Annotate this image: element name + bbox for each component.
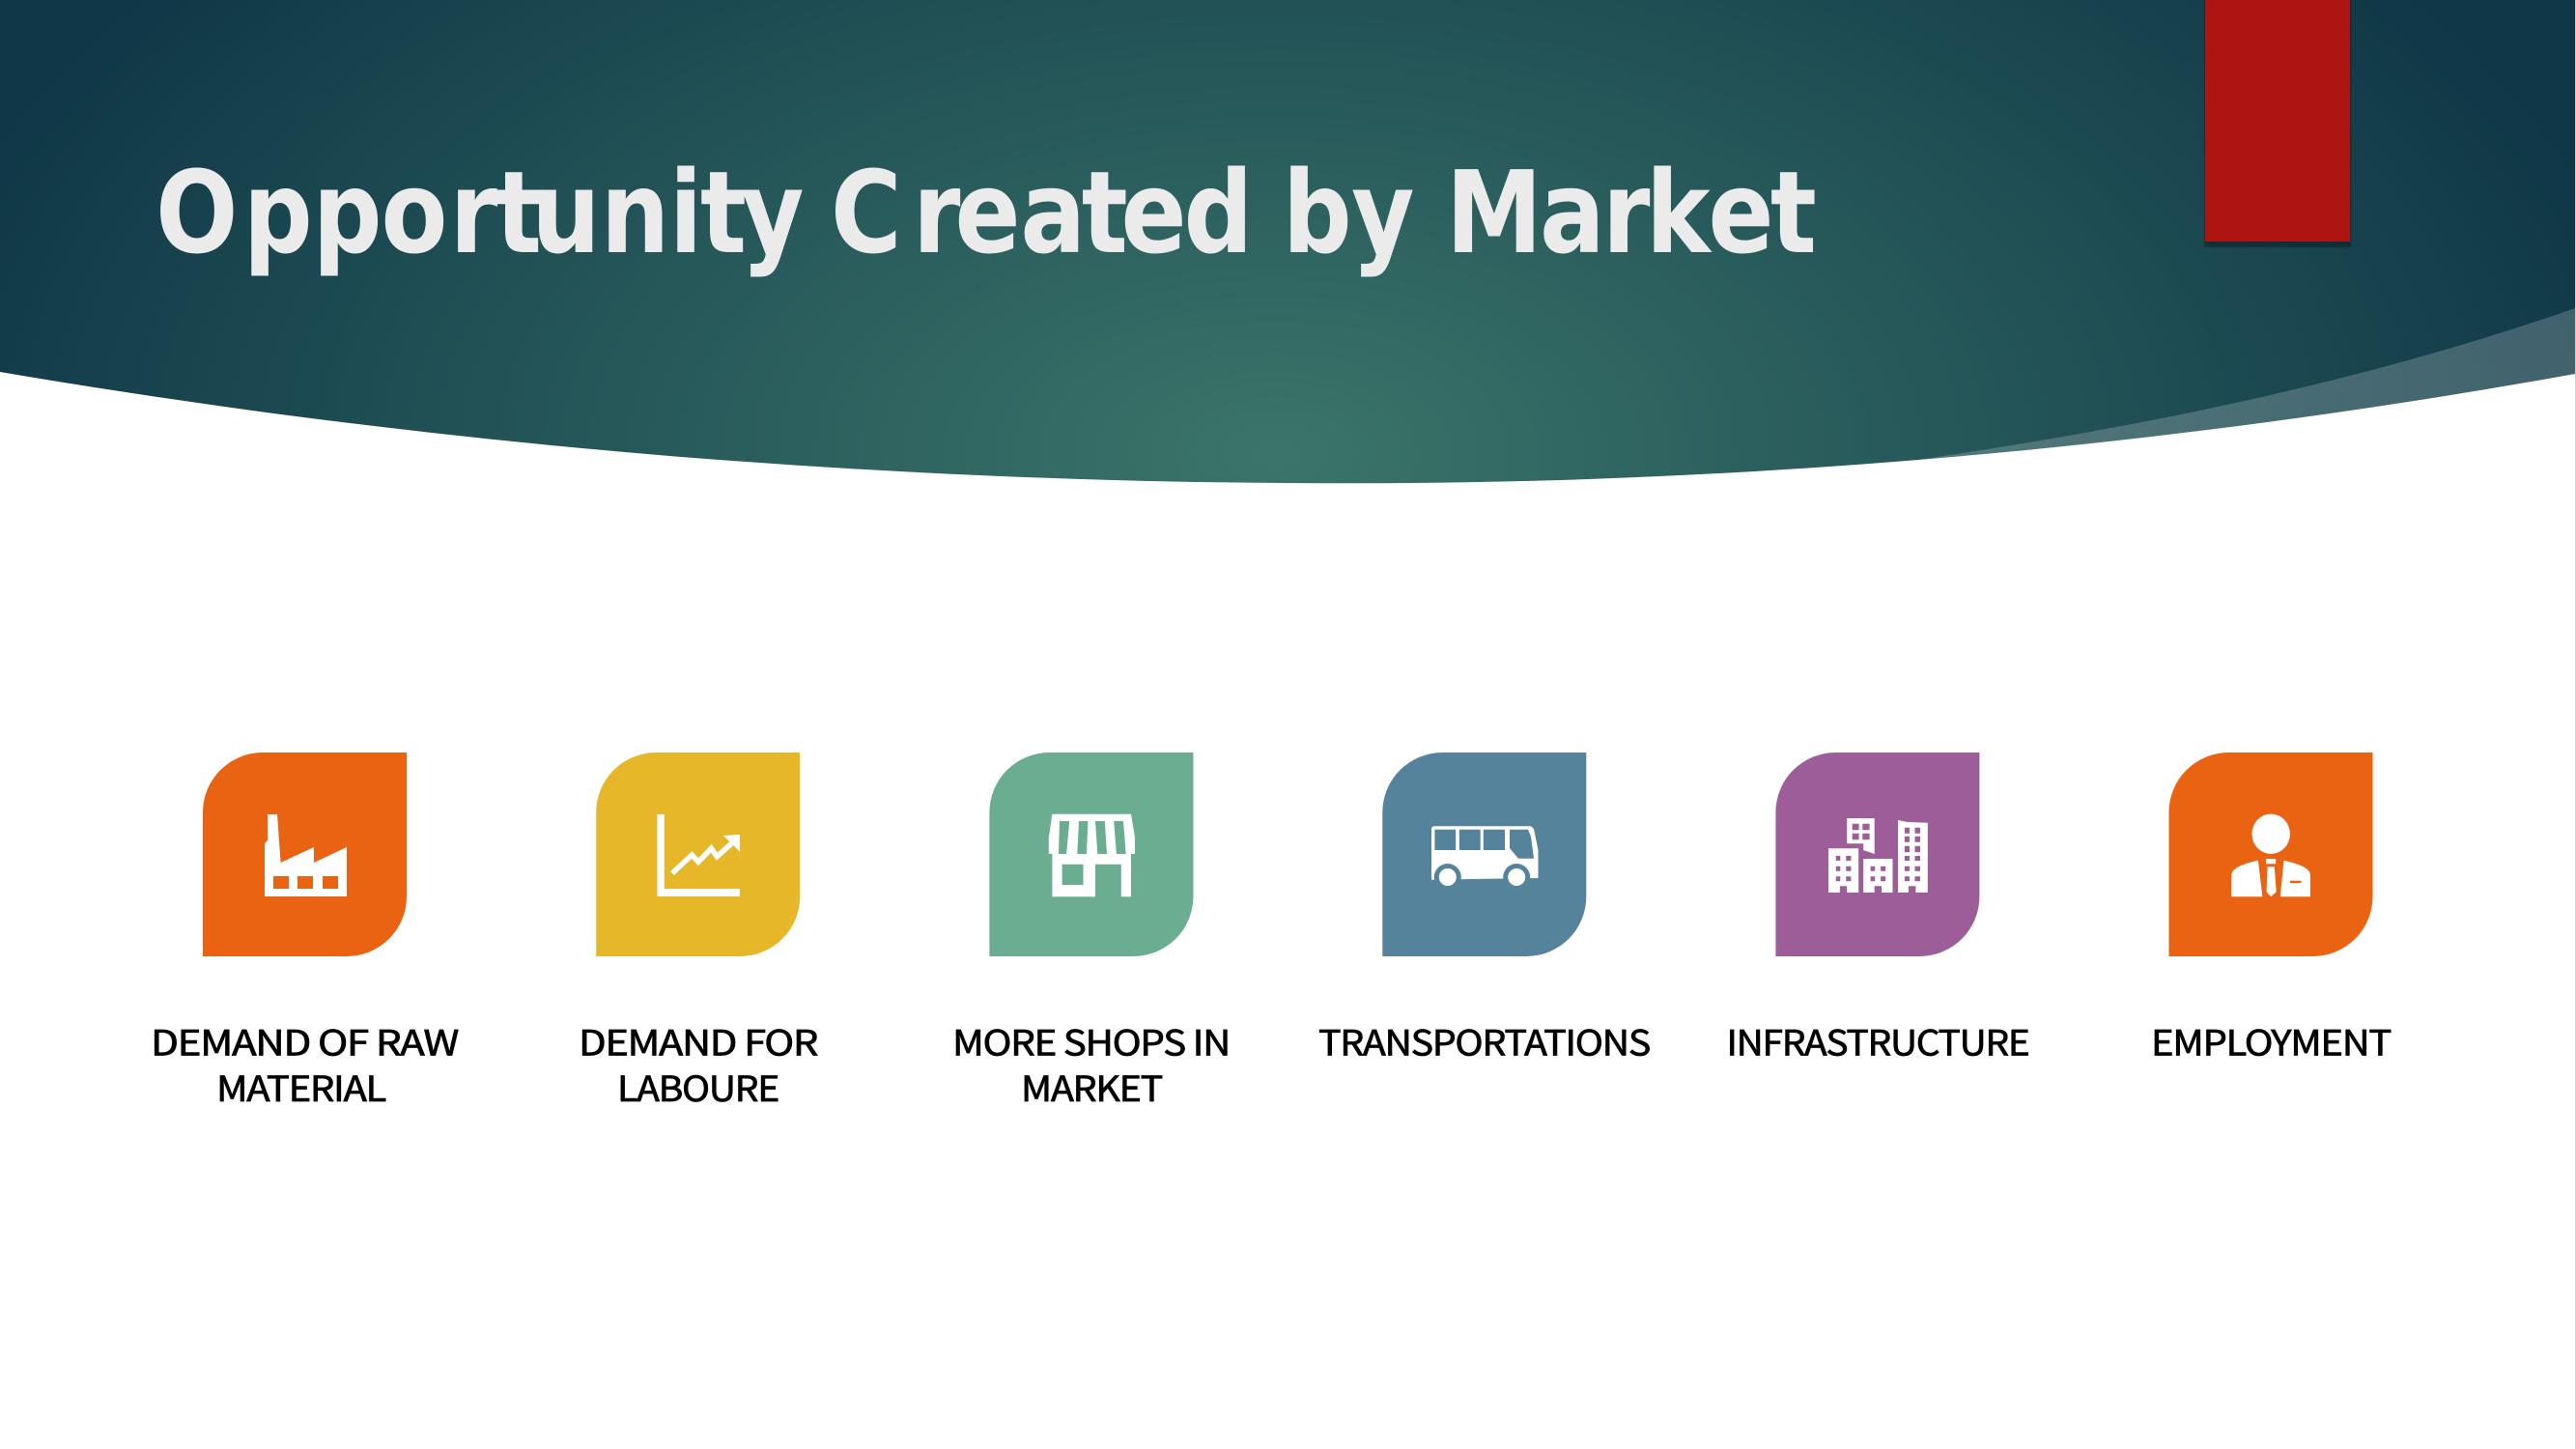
item: demand of raw material — [151, 753, 459, 1112]
curved accent band — [1919, 308, 2575, 460]
label: DEMAND FOR — [579, 1016, 817, 1066]
item: more shops in market — [952, 753, 1230, 1112]
icon: factory — [265, 814, 347, 896]
card: orange — [2169, 753, 2372, 956]
icon: growth chart — [657, 814, 740, 896]
label: INFRASTRUCTURE — [1727, 1016, 2028, 1066]
item: transportations — [1318, 753, 1650, 1066]
item: infrastructure — [1727, 753, 2028, 1066]
card: yellow — [596, 753, 800, 956]
title: Opportunity Created by Market — [156, 146, 1817, 279]
header banner — [0, 0, 2575, 502]
label: LABOURE — [617, 1062, 778, 1112]
icon: buildings — [1828, 818, 1928, 893]
icon: bus — [1431, 826, 1538, 891]
card: green — [989, 753, 1193, 956]
label: MORE SHOPS IN — [952, 1016, 1230, 1066]
item: demand for laboure — [579, 753, 817, 1112]
card: blue — [1382, 753, 1586, 956]
label: MATERIAL — [216, 1062, 386, 1112]
label: TRANSPORTATIONS — [1318, 1016, 1650, 1066]
label: DEMAND OF RAW — [151, 1016, 459, 1066]
red ribbon — [2204, 0, 2351, 247]
label: MARKET — [1021, 1062, 1163, 1112]
card: purple — [1775, 753, 1979, 956]
item: employment — [2151, 753, 2392, 1066]
icon: shop — [1049, 814, 1135, 896]
card: orange — [203, 753, 407, 956]
label: EMPLOYMENT — [2151, 1016, 2392, 1066]
icon: businessman — [2231, 814, 2310, 896]
